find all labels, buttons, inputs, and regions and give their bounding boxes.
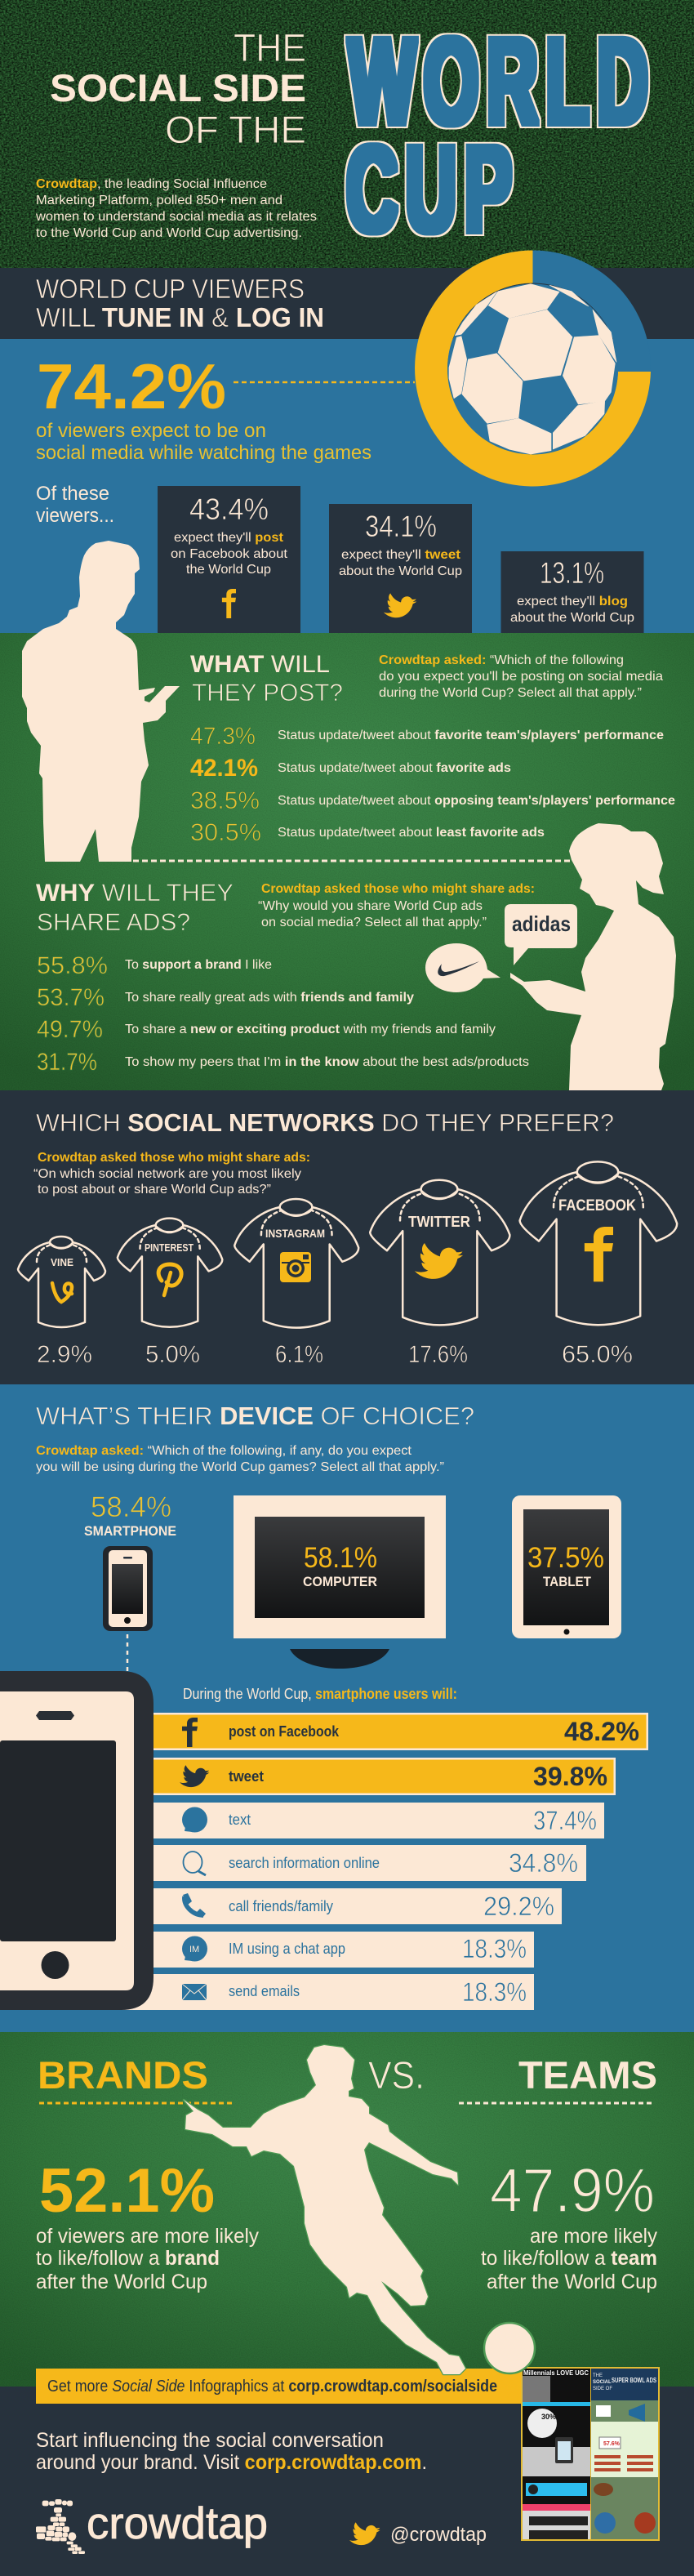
bar: search information online 34.8 percent: 34.8% bbox=[509, 1848, 578, 1878]
text: start influencing the social conversation: Start influencing the social conversation bbox=[36, 2429, 384, 2452]
text: crowdtap asked post question: Crowdtap asked: “Which of the following bbox=[379, 653, 624, 667]
text: crowdtap asked post question: during the World Cup? Select all that apply.” bbox=[379, 686, 642, 700]
row: 47.3 percent: Status update/tweet about favorite team's/players' performance bbox=[278, 729, 664, 742]
panel: green brands vs teams section bbox=[0, 2032, 694, 2387]
heading: why will they share ads: SHARE ADS? bbox=[37, 909, 190, 936]
card: 43.4 percent facebook: the World Cup bbox=[186, 563, 271, 577]
row: 30.5 percent: 30.5% bbox=[190, 819, 261, 846]
heading: what will they post: THEY POST? bbox=[192, 680, 343, 706]
bar: call friends/family 29.2 percent: call friends/family bbox=[229, 1898, 333, 1914]
shirt: vine: 2.9% bbox=[37, 1341, 92, 1368]
row: 38.5 percent: 38.5% bbox=[190, 787, 260, 814]
text: crowdtap asked networks question: Crowdtap asked those who might share ads: bbox=[38, 1151, 310, 1165]
logo: crowdtap bbox=[36, 2498, 268, 2554]
row: 53.7 percent bbox=[37, 984, 414, 1011]
stat: brands 52.1 percent: to like/follow a brand bbox=[36, 2247, 220, 2270]
shirt: pinterest: PINTEREST bbox=[145, 1242, 194, 1254]
logo: crowdtap: crowdtap bbox=[87, 2498, 268, 2548]
list: what they will post bbox=[190, 723, 675, 846]
shirt: instagram: 6.1% bbox=[275, 1341, 323, 1368]
bar: send emails 18.3 percent bbox=[122, 1974, 534, 2010]
speech bubble: adidas: adidas bbox=[512, 911, 571, 936]
heading: world cup viewers will tune in and log in bbox=[36, 274, 324, 332]
text: start influencing the social conversation: around your brand. Visit corp.crowdtap.com. bbox=[36, 2451, 427, 2474]
title: world cup: WORLD bbox=[349, 12, 656, 149]
title: the social side of the: SOCIAL SIDE bbox=[50, 66, 306, 109]
row: 49.7 percent: To share a new or exciting product with my friends and family bbox=[125, 1023, 496, 1036]
text: crowdtap asked networks question bbox=[33, 1151, 310, 1197]
title: world cup: CUP bbox=[346, 120, 519, 257]
intro text: to the World Cup and World Cup advertising. bbox=[36, 226, 302, 240]
speech bubble: adidas bbox=[505, 904, 577, 965]
row: 30.5 percent: Status update/tweet about least favorite ads bbox=[278, 826, 545, 840]
dashed connector bbox=[234, 381, 415, 383]
text: @crowdtap: @crowdtap bbox=[390, 2524, 487, 2546]
card: 34.1 percent twitter: expect they'll tweet bbox=[341, 548, 461, 562]
stat: teams 47.9 percent: after the World Cup bbox=[487, 2271, 657, 2293]
device: tablet 37.5 percent: 37.5% bbox=[527, 1542, 604, 1574]
text: crowdtap asked share question: Crowdtap asked those who might share ads: bbox=[261, 882, 535, 896]
bar: im using a chat app 18.3 percent: IM using a chat app bbox=[229, 1941, 345, 1957]
card: 43.4 percent facebook bbox=[158, 486, 300, 633]
heading: what will they post bbox=[190, 651, 343, 706]
card: 13.1 percent blog bbox=[501, 551, 643, 633]
icon: soccer ball panels bbox=[449, 284, 616, 454]
bar: tweet 39.8 percent: tweet bbox=[229, 1768, 264, 1785]
row: 49.7 percent bbox=[37, 1016, 496, 1043]
thumbnail left column: 30% bbox=[541, 2413, 556, 2421]
device: computer 58.1 percent: COMPUTER bbox=[303, 1575, 377, 1589]
intro text bbox=[35, 177, 317, 240]
bar: post on facebook 48.2 percent: 48.2% bbox=[564, 1717, 639, 1746]
text: viewers expect to be on social media: social media while watching the games bbox=[36, 442, 371, 464]
stat: teams 47.9 percent: to like/follow a team bbox=[481, 2247, 657, 2270]
row: 55.8 percent bbox=[37, 952, 272, 979]
bar: search information online 34.8 percent bbox=[122, 1845, 586, 1881]
thumbnail right column bbox=[591, 2369, 658, 2539]
panel: green post and share section bbox=[0, 633, 694, 1090]
row: 42.1 percent bbox=[190, 755, 511, 782]
text: crowdtap asked networks question: “On which social network are you most likely bbox=[33, 1167, 301, 1181]
intro text: women to understand social media as it relates bbox=[35, 210, 317, 224]
bar: send emails 18.3 percent: send emails bbox=[229, 1983, 300, 1999]
row: 49.7 percent: 49.7% bbox=[37, 1016, 103, 1043]
device: large smartphone bbox=[0, 1671, 153, 2010]
bar: text 37.4 percent: text bbox=[229, 1812, 251, 1828]
text: crowdtap asked device question bbox=[36, 1444, 444, 1474]
card: 34.1 percent twitter: 34.1% bbox=[365, 510, 437, 543]
donut chart: 74.2 percent with soccer ball bbox=[415, 250, 651, 487]
row: 30.5 percent bbox=[190, 819, 545, 846]
bar: im using a chat app 18.3 percent bbox=[122, 1932, 534, 1968]
text: start influencing the social conversation bbox=[36, 2429, 427, 2474]
thumbnail left column bbox=[523, 2369, 590, 2539]
text: crowdtap asked post question bbox=[379, 653, 663, 700]
intro text: Marketing Platform, polled 850+ men and bbox=[36, 194, 282, 207]
bar: post on facebook 48.2 percent: post on Facebook bbox=[229, 1723, 340, 1740]
text: during the world cup smartphone users will: During the World Cup, smartphone users will: bbox=[183, 1686, 457, 1702]
text: crowdtap asked share question: “Why would you share World Cup ads bbox=[258, 899, 483, 913]
title: world cup bbox=[346, 12, 656, 257]
bar: im using a chat app 18.3 percent: IM bbox=[189, 1945, 199, 1954]
card: 34.1 percent twitter bbox=[329, 504, 472, 633]
bar: tweet 39.8 percent: 39.8% bbox=[533, 1762, 607, 1791]
icon: player's ball bbox=[484, 2323, 535, 2373]
text: crowdtap asked post question: do you expect you'll be posting on social media bbox=[379, 670, 663, 684]
panel: blue viewers section bbox=[0, 339, 694, 633]
list: why they will share ads bbox=[37, 952, 529, 1076]
device: smartphone 58.4 percent: SMARTPHONE bbox=[84, 1524, 176, 1539]
panel: grass header background bbox=[0, 0, 694, 268]
stat: brands 52.1 percent: after the World Cup bbox=[36, 2271, 207, 2293]
card: 13.1 percent blog: expect they'll blog bbox=[517, 595, 628, 608]
text: crowdtap asked networks question: to post about or share World Cup ads?” bbox=[38, 1183, 271, 1197]
banner: get more social side infographics bbox=[36, 2369, 523, 2404]
bar: text 37.4 percent bbox=[122, 1803, 604, 1838]
text: crowdtap asked device question: you will be using during the World Cup games? Select all that apply.” bbox=[36, 1460, 444, 1474]
panel: dark social networks section bbox=[0, 1090, 694, 1384]
bar: send emails 18.3 percent: 18.3% bbox=[462, 1977, 527, 2007]
device: tablet 37.5 percent bbox=[512, 1495, 621, 1638]
shirt: vine: VINE bbox=[51, 1257, 73, 1268]
shirt: twitter: TWITTER bbox=[408, 1213, 470, 1230]
heading: what's their device of choice: WHAT’S THEIR DEVICE OF CHOICE? bbox=[36, 1402, 474, 1430]
device: smartphone 58.4 percent bbox=[84, 1491, 176, 1671]
row: 55.8 percent: 55.8% bbox=[37, 952, 108, 979]
intro text: Crowdtap, the leading Social Influence bbox=[36, 177, 267, 191]
stat: brands 52.1 percent: 52.1% bbox=[39, 2156, 215, 2226]
shirt: instagram: INSTAGRAM bbox=[265, 1228, 325, 1240]
thumbnail: other social side infographics bbox=[521, 2367, 660, 2541]
thumbnail left column: Millennials LOVE UGC bbox=[523, 2369, 589, 2377]
row: 47.3 percent bbox=[190, 723, 664, 750]
thumbnail right column: SUPER BOWL ADS bbox=[612, 2376, 656, 2384]
heading: teams: TEAMS bbox=[518, 2053, 657, 2097]
stat: teams 47.9 percent: are more likely bbox=[530, 2225, 657, 2248]
title: the social side of the: THE bbox=[234, 27, 306, 70]
speech bubble: nike swoosh bbox=[425, 943, 500, 992]
panel: dark heading band bbox=[0, 268, 694, 339]
heading: which social networks do they prefer: WHICH SOCIAL NETWORKS DO THEY PREFER? bbox=[36, 1108, 614, 1137]
thumbnail right column: SOCIAL bbox=[593, 2380, 612, 2385]
card: 43.4 percent facebook: expect they'll post bbox=[174, 531, 284, 545]
panel: dark footer bbox=[0, 2387, 694, 2576]
device: smartphone 58.4 percent: 58.4% bbox=[91, 1491, 171, 1523]
card: 43.4 percent facebook: 43.4% bbox=[189, 492, 269, 526]
card: 34.1 percent twitter: about the World Cup bbox=[339, 564, 462, 578]
card: 13.1 percent blog: about the World Cup bbox=[510, 611, 634, 625]
heading: brands: BRANDS bbox=[38, 2053, 208, 2097]
bar: tweet 39.8 percent bbox=[122, 1758, 616, 1795]
shirt: pinterest: 5.0% bbox=[145, 1341, 200, 1368]
device: tablet 37.5 percent: TABLET bbox=[543, 1575, 591, 1589]
silhouette: man with phone bbox=[22, 541, 180, 862]
silhouette: soccer player kicking bbox=[184, 2045, 465, 2374]
text: of these viewers bbox=[36, 483, 114, 527]
shirt: instagram bbox=[234, 1199, 358, 1368]
shirt: vine bbox=[18, 1237, 105, 1368]
row: 31.7 percent: 31.7% bbox=[37, 1049, 97, 1076]
heading: vs: VS. bbox=[368, 2053, 425, 2097]
stat: teams 47.9 percent bbox=[481, 2156, 657, 2293]
row: 42.1 percent: Status update/tweet about favorite ads bbox=[278, 761, 511, 775]
thumbnail right column: 57.6% bbox=[603, 2441, 621, 2447]
panel: blue device section bbox=[0, 1384, 694, 2032]
icon: twitter bird footer bbox=[349, 2520, 380, 2549]
device: computer 58.1 percent: 58.1% bbox=[304, 1542, 377, 1574]
text: of these viewers: Of these bbox=[36, 483, 109, 505]
card: 13.1 percent blog: 13.1% bbox=[540, 556, 604, 590]
bar: call friends/family 29.2 percent: 29.2% bbox=[483, 1892, 554, 1921]
row: 53.7 percent: To share really great ads with friends and family bbox=[125, 991, 414, 1005]
heading: what will they post: WHAT WILL bbox=[190, 651, 330, 678]
text: crowdtap asked device question: Crowdtap asked: “Which of the following, if any, do you expect bbox=[36, 1444, 412, 1458]
shirt: facebook bbox=[520, 1161, 677, 1368]
card: 43.4 percent facebook: on Facebook about bbox=[171, 547, 288, 561]
text: viewers expect to be on social media: of viewers expect to be on bbox=[36, 420, 266, 442]
bar: text 37.4 percent: 37.4% bbox=[533, 1806, 597, 1835]
row: 53.7 percent: 53.7% bbox=[37, 984, 105, 1011]
title: the social side of the bbox=[50, 27, 306, 151]
thumbnail right column: SIDE OF bbox=[593, 2387, 612, 2391]
bar: call friends/family 29.2 percent bbox=[122, 1888, 562, 1924]
shirt: twitter bbox=[370, 1180, 509, 1368]
device: computer 58.1 percent bbox=[234, 1495, 446, 1669]
row: 38.5 percent: Status update/tweet about opposing team's/players' performance bbox=[278, 794, 675, 808]
shirt: twitter: 17.6% bbox=[408, 1341, 468, 1368]
row: 47.3 percent: 47.3% bbox=[190, 723, 256, 750]
bar: search information online 34.8 percent: search information online bbox=[229, 1855, 380, 1871]
row: 55.8 percent: To support a brand I like bbox=[125, 958, 272, 972]
text: viewers expect to be on social media bbox=[36, 420, 371, 464]
icon: stone tap bbox=[36, 2499, 85, 2554]
silhouette: woman with phone bbox=[510, 823, 676, 1090]
stat: teams 47.9 percent: 47.9% bbox=[490, 2156, 655, 2226]
shirt: facebook: FACEBOOK bbox=[558, 1197, 636, 1214]
row: 42.1 percent: 42.1% bbox=[190, 755, 258, 782]
text: crowdtap asked share question bbox=[258, 882, 535, 929]
stat: brands 52.1 percent bbox=[36, 2156, 259, 2293]
row: 31.7 percent bbox=[37, 1049, 529, 1076]
bar: post on facebook 48.2 percent bbox=[122, 1713, 648, 1750]
text: crowdtap asked share question: on social media? Select all that apply.” bbox=[261, 916, 487, 929]
shirt: pinterest bbox=[118, 1219, 222, 1368]
stat: brands 52.1 percent: of viewers are more likely bbox=[36, 2225, 259, 2248]
text: of these viewers: viewers... bbox=[36, 505, 114, 527]
shirt: facebook: 65.0% bbox=[562, 1341, 633, 1368]
heading: why will they share ads bbox=[36, 880, 234, 936]
heading: why will they share ads: WHY WILL THEY bbox=[36, 880, 234, 907]
heading: world cup viewers will tune in and log in: WILL TUNE IN & LOG IN bbox=[36, 302, 324, 332]
row: 38.5 percent bbox=[190, 787, 675, 814]
banner: get more social side infographics: Get more Social Side Infographics at corp.crowdtap.com/socialside bbox=[47, 2378, 497, 2396]
big stat: 74.2 percent: 74.2% bbox=[37, 350, 226, 422]
heading: world cup viewers will tune in and log in: WORLD CUP VIEWERS bbox=[36, 274, 305, 304]
bar: im using a chat app 18.3 percent: 18.3% bbox=[462, 1934, 527, 1963]
title: the social side of the: OF THE bbox=[165, 108, 306, 151]
thumbnail right column: THE bbox=[593, 2373, 603, 2378]
row: 31.7 percent: To show my peers that I'm in the know about the best ads/products bbox=[125, 1055, 529, 1069]
